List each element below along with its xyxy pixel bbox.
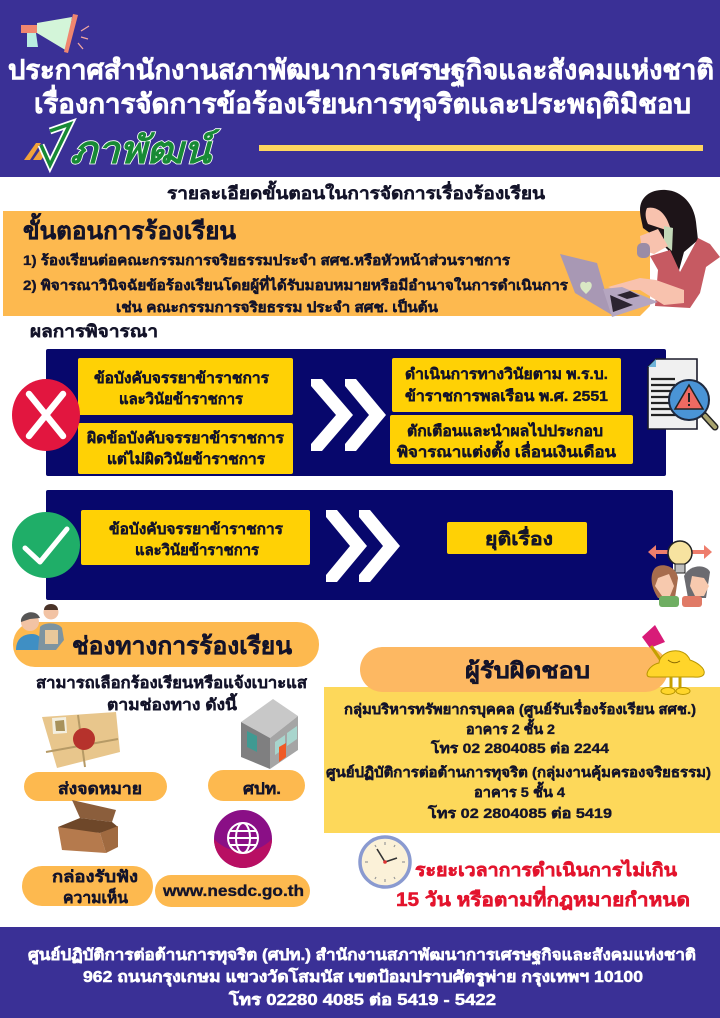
responsible heading pill <box>360 647 668 692</box>
step 2: 2) พิจารณาวินิจฉัยข้อร้องเรียนโดยผู้ที่ได้รับมอบหมายหรือมีอำนาจในการดำเนินการ <box>23 275 569 294</box>
deadline text: ระยะเวลาการดำเนินการไม่เกิน <box>415 859 678 880</box>
pill: send letter <box>24 772 167 801</box>
icon: two people with lightbulb <box>648 541 712 607</box>
box: warning action: พิจารณาแต่งตั้ง เลื่อนเงินเดือน <box>397 440 617 461</box>
footer band <box>0 927 720 1018</box>
channels heading pill: ช่องทางการร้องเรียน <box>72 633 293 660</box>
panel: complaint channels <box>13 604 319 907</box>
channels description line 2: ตามช่องทาง ดังนี้ <box>107 693 237 714</box>
channels description: สามารถเลือกร้องเรียนหรือแจ้งเบาะแส <box>36 674 308 692</box>
logo <box>24 124 221 172</box>
header band <box>0 0 720 177</box>
box: case closed: ยุติเรื่อง <box>485 526 553 551</box>
footer band: ศูนย์ปฏิบัติการต่อต้านการทุจริต (ศปท.) สำนักงานสภาพัฒนาการเศรษฐกิจและสังคมแห่งชาติ <box>28 946 696 966</box>
contact 1: กลุ่มบริหารทรัพยากรบุคคล (ศูนย์รับเรื่องร้องเรียน สศช.) <box>344 699 696 718</box>
pill: anti-corruption center <box>208 770 305 801</box>
box: violation 2: แต่ไม่ผิดวินัยข้าราชการ <box>107 449 266 468</box>
title line 2: เรื่องการจัดการข้อร้องเรียนการทุจริตและประพฤติมิชอบ <box>34 84 691 121</box>
pill: website <box>155 875 310 907</box>
contact 2: ศูนย์ปฏิบัติการต่อต้านการทุจริต (กลุ่มงานคุ้มครองจริยธรรม) <box>326 764 711 781</box>
icon: sealed envelope <box>42 712 120 768</box>
icon: red cross <box>12 379 80 451</box>
icon: cardboard box <box>58 800 118 853</box>
pill: anti-corruption center: ศปท. <box>243 781 281 798</box>
subheading: รายละเอียดขั้นตอนในการจัดการเรื่องร้องเรียน <box>167 180 545 203</box>
icon: cloud mascot with megaphone <box>642 625 704 694</box>
box: no violation: ข้อบังคับจรรยาข้าราชการ <box>109 521 284 538</box>
icon: two people <box>16 604 64 650</box>
panel: no violation outcome <box>46 490 673 600</box>
footer band: โทร 02280 4085 ต่อ 5419 - 5422 <box>228 990 496 1009</box>
steps heading: ขั้นตอนการร้องเรียน <box>23 212 237 245</box>
pill: website: www.nesdc.go.th <box>162 883 304 900</box>
panel: complaint steps <box>3 211 650 316</box>
logo: ภาพัฒน์ <box>70 129 221 172</box>
deadline text <box>396 859 690 911</box>
panel: violation outcome <box>46 349 666 476</box>
pill: send letter: ส่งจดหมาย <box>58 781 142 798</box>
footer band: 962 ถนนกรุงเกษม แขวงวัดโสมนัส เขตป้อมปราบศัตรูพ่าย กรุงเทพฯ 10100 <box>83 967 643 988</box>
yellow rule <box>259 145 703 151</box>
box: violation 1 <box>78 358 293 415</box>
contact 2: โทร 02 2804085 ต่อ 5419 <box>427 804 612 821</box>
step 1: 1) ร้องเรียนต่อคณะกรรมการจริยธรรมประจำ สศช.หรือหัวหน้าส่วนราชการ <box>23 252 511 268</box>
pill: feedback box: กล่องรับฟัง <box>52 868 138 886</box>
icon: globe <box>214 810 272 868</box>
icon: document with warning magnifier <box>648 359 715 429</box>
contact 2 <box>326 764 711 821</box>
contact 2: อาคาร 5 ชั้น 4 <box>474 781 565 800</box>
arrow: double chevron <box>311 379 386 451</box>
contact 1 <box>344 699 696 756</box>
box: violation 2 <box>78 423 293 474</box>
contact 1: อาคาร 2 ชั้น 2 <box>466 718 555 737</box>
deadline text: 15 วัน หรือตามที่กฎหมายกำหนด <box>396 886 690 911</box>
step 2 continued: เช่น คณะกรรมการจริยธรรม ประจำ สศช. เป็นต้น <box>116 298 438 315</box>
box: violation 2: ผิดข้อบังคับจรรยาข้าราชการ <box>87 429 285 447</box>
icon: woman with laptop <box>560 190 720 317</box>
box: violation 1: และวินัยข้าราชการ <box>119 390 244 408</box>
icon: megaphone <box>21 14 89 53</box>
pill: feedback box: ความเห็น <box>63 886 128 907</box>
channels heading pill <box>13 622 319 667</box>
arrow: double chevron <box>326 510 400 582</box>
icon: building <box>241 699 298 769</box>
box: case closed <box>447 522 587 554</box>
box: warning action: ตักเตือนและนำผลไปประกอบ <box>407 421 603 440</box>
title line 1: ประกาศสำนักงานสภาพัฒนาการเศรษฐกิจและสังคมแห่งชาติ <box>8 55 714 88</box>
box: no violation: และวินัยข้าราชการ <box>135 541 260 559</box>
box: discipline action <box>392 358 621 412</box>
results heading: ผลการพิจารณา <box>30 322 158 341</box>
box: no violation <box>81 510 310 565</box>
box: discipline action: ข้าราชการพลเรือน พ.ศ. 2551 <box>405 388 608 405</box>
responsible heading pill: ผู้รับผิดชอบ <box>465 658 590 685</box>
icon: clock <box>360 837 410 887</box>
panel: responsible parties <box>324 625 720 833</box>
box: warning action <box>390 415 633 464</box>
box: discipline action: ดำเนินการทางวินัยตาม พ.ร.บ. <box>405 365 608 383</box>
box: violation 1: ข้อบังคับจรรยาข้าราชการ <box>94 370 270 387</box>
icon: green check <box>12 512 80 578</box>
pill: feedback box <box>22 866 153 907</box>
contact 1: โทร 02 2804085 ต่อ 2244 <box>430 739 609 756</box>
